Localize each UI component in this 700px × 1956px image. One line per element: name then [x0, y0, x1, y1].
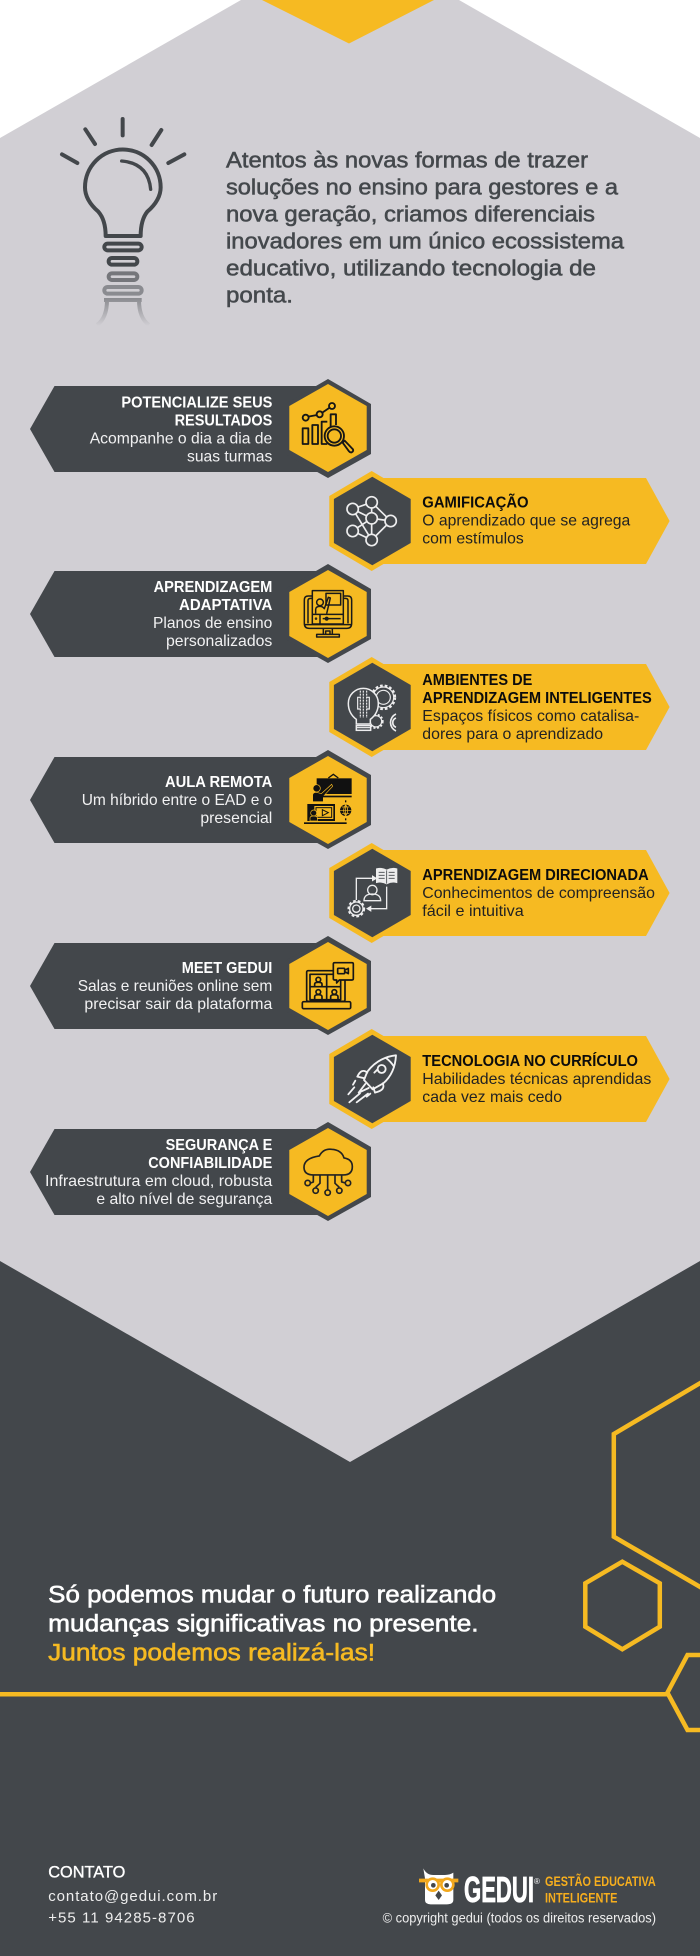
panel: aula remota: AULA REMOTA — [165, 774, 272, 791]
icon: light bulb — [62, 119, 184, 294]
panel: segurança e confiabilidade: CONFIABILIDADE — [148, 1155, 272, 1172]
top yellow chevron — [262, 0, 434, 44]
panel: gamificação: O aprendizado que se agrega — [422, 513, 630, 530]
panel: meet gedui: precisar sair da plataforma — [84, 996, 272, 1013]
intro text: Atentos às novas formas de trazer — [226, 148, 589, 173]
icon: video meeting on laptop — [302, 963, 353, 1009]
closing statement: Só podemos mudar o futuro realizando — [48, 1581, 496, 1608]
contact block: +55 11 94285-8706 — [48, 1910, 195, 1927]
contact block: CONTATO — [48, 1864, 126, 1882]
panel: aprendizagem direcionada: fácil e intuitiva — [422, 903, 524, 920]
panel: aula remota: presencial — [200, 810, 272, 827]
intro text: nova geração, criamos diferenciais — [226, 202, 595, 227]
icon: bulb with gears — [348, 686, 396, 731]
contact block: contato@gedui.com.br — [48, 1888, 217, 1905]
panel: aprendizagem adaptativa: APRENDIZAGEM — [154, 579, 272, 596]
panel: ambientes de aprendizagem inteligentes — [329, 657, 670, 757]
intro text — [226, 148, 625, 308]
panel: aprendizagem direcionada — [329, 843, 670, 943]
panel: gamificação: com estímulos — [422, 531, 524, 548]
panel: ambientes de aprendizagem inteligentes: dores para o aprendizado — [422, 726, 603, 743]
logo: wordmark: GESTÃO EDUCATIVA — [545, 1874, 656, 1889]
panel: aula remota: Um híbrido entre o EAD e o — [82, 792, 272, 809]
icon: chart and magnifier — [303, 403, 353, 452]
closing statement: mudanças significativas no presente. — [48, 1610, 479, 1637]
panel: meet gedui: Salas e reuniões online sem — [78, 978, 272, 995]
background: grey hexagonal panel — [0, 0, 700, 1480]
panel: aprendizagem adaptativa: personalizados — [166, 633, 272, 650]
closing statement — [48, 1581, 496, 1666]
panel: potencialize seus resultados: RESULTADOS — [175, 412, 272, 429]
panel: segurança e confiabilidade: SEGURANÇA E — [166, 1137, 272, 1154]
panel: aprendizagem direcionada: Conhecimentos de compreensão — [422, 885, 655, 902]
bottom dark panel — [0, 1261, 700, 1956]
icon: bulb reflection — [97, 300, 149, 325]
panel: aprendizagem adaptativa: Planos de ensino — [153, 615, 272, 632]
panel: segurança e confiabilidade: e alto nível de segurança — [96, 1191, 272, 1208]
panel: tecnologia no currículo: TECNOLOGIA NO CURRÍCULO — [422, 1051, 638, 1070]
intro text: inovadores em um único ecossistema — [226, 229, 625, 254]
panel: ambientes de aprendizagem inteligentes: AMBIENTES DE — [422, 672, 532, 689]
panel: potencialize seus resultados: POTENCIALIZE SEUS — [121, 394, 272, 411]
panel: gamificação — [329, 471, 670, 571]
icon: network nodes — [347, 497, 396, 546]
panel: potencialize seus resultados — [30, 379, 371, 478]
intro text: educativo, utilizando tecnologia de — [226, 256, 596, 281]
panel: aprendizagem adaptativa: ADAPTATIVA — [179, 597, 272, 614]
panel: meet gedui: MEET GEDUI — [182, 960, 272, 977]
icon: rocket — [348, 1055, 396, 1102]
copyright: © copyright gedui (todos os direitos reservados) — [383, 1911, 656, 1926]
panel: potencialize seus resultados: Acompanhe o dia a dia de — [90, 430, 272, 447]
contact block — [48, 1864, 217, 1927]
logo: wordmark: GEDUI — [464, 1869, 534, 1910]
logo: gedui owl — [419, 1868, 458, 1904]
icon: remote classroom — [304, 774, 352, 824]
panel: meet gedui — [30, 936, 371, 1035]
icon: cloud with circuit — [304, 1149, 352, 1195]
panel: aula remota — [30, 750, 371, 849]
logo: wordmark: ® — [534, 1877, 540, 1886]
panel: aprendizagem direcionada: APRENDIZAGEM DIRECIONADA — [422, 867, 649, 884]
logo: wordmark: INTELIGENTE — [545, 1890, 617, 1905]
panel: segurança e confiabilidade — [30, 1122, 371, 1221]
intro text: soluções no ensino para gestores e a — [226, 175, 619, 200]
panel: tecnologia no currículo: cada vez mais cedo — [422, 1089, 562, 1106]
icon: online teacher on monitor — [304, 591, 352, 637]
panel: gamificação: GAMIFICAÇÃO — [422, 492, 529, 512]
panel: aprendizagem adaptativa — [30, 564, 371, 663]
icon: person, book and gear cycle — [349, 869, 397, 916]
intro text: ponta. — [226, 283, 293, 308]
panel: ambientes de aprendizagem inteligentes: Espaços físicos como catalisa- — [422, 708, 639, 725]
logo: wordmark — [464, 1869, 656, 1910]
panel: segurança e confiabilidade: Infraestrutura em cloud, robusta — [45, 1173, 272, 1190]
panel: potencialize seus resultados: suas turmas — [187, 448, 272, 465]
panel: tecnologia no currículo: Habilidades técnicas aprendidas — [422, 1071, 651, 1088]
closing statement: Juntos podemos realizá-las! — [48, 1640, 375, 1666]
panel: tecnologia no currículo — [329, 1029, 670, 1129]
decorative hexagon outlines — [0, 1382, 700, 1730]
panel: ambientes de aprendizagem inteligentes: APRENDIZAGEM INTELIGENTES — [422, 690, 652, 707]
